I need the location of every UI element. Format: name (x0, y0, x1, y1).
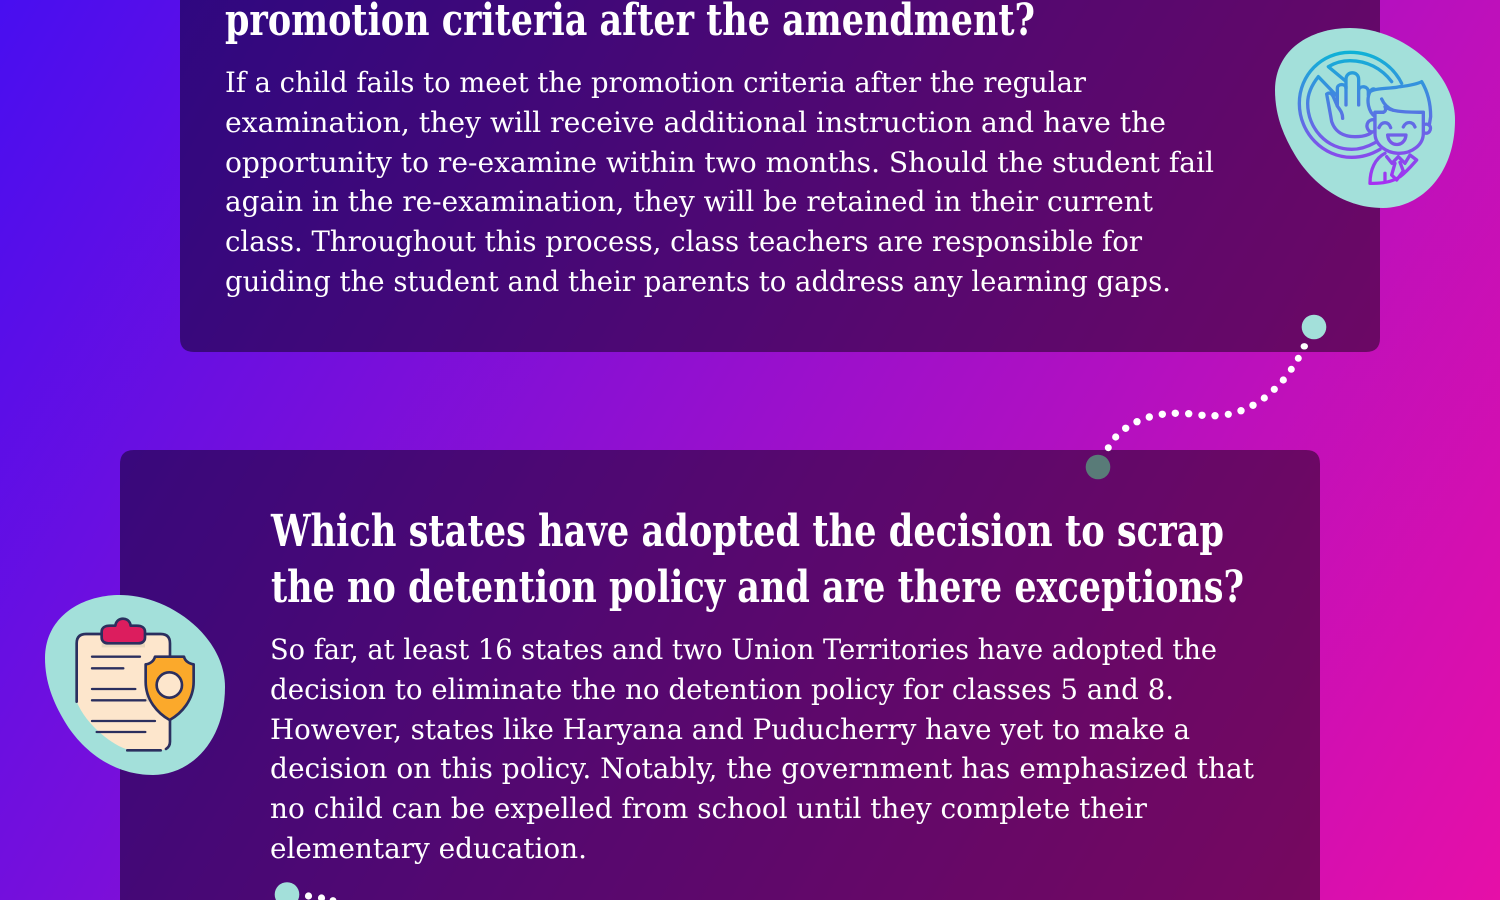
text block: states answer: decision to eliminate the no detention policy for classes 5 and 8. (270, 673, 1174, 706)
text block: promotion answer: again in the re-examination, they will be retained in their current (225, 185, 1154, 218)
panel: states adoption (120, 450, 1320, 900)
icon: no-entry hand and smiling boy (1275, 28, 1455, 208)
heading: states adoption: the no detention policy and are there exceptions? (271, 562, 1244, 613)
connector start dot under lower panel (1086, 455, 1110, 479)
heading: states adoption: Which states have adopted the decision to scrap (270, 506, 1224, 557)
connector: dotted path between panels (1105, 315, 1326, 451)
text block: states answer: decision on this policy. Notably, the government has emphasized that (270, 752, 1255, 785)
sheet outline (77, 634, 170, 750)
connector: dotted path leaving lower panel (275, 882, 336, 900)
shadows (102, 643, 170, 702)
text block: promotion answer: opportunity to re-examine within two months. Should the student fail (225, 146, 1214, 179)
shield (146, 657, 194, 720)
icon: clipboard with shield (45, 595, 225, 775)
text block: promotion answer: guiding the student and their parents to address any learning gaps. (225, 265, 1171, 298)
shield emblem (157, 672, 182, 698)
clipboard lines (92, 657, 155, 732)
text block: promotion answer: If a child fails to meet the promotion criteria after the regular (225, 66, 1087, 99)
text block: promotion answer: examination, they will receive additional instruction and have the (225, 106, 1166, 139)
text block: states answer: However, states like Haryana and Puducherry have yet to make a (270, 713, 1190, 746)
panel: promotion criteria (180, 0, 1380, 352)
text block: promotion answer: class. Throughout this process, class teachers are responsible for (225, 225, 1143, 258)
text block: states answer (270, 633, 1255, 865)
text block: promotion answer (225, 66, 1214, 298)
heading: states adoption (270, 506, 1244, 613)
text block: states answer: elementary education. (270, 832, 587, 865)
text block: states answer: So far, at least 16 states and two Union Territories have adopted the (270, 633, 1217, 666)
clipboard clip (102, 619, 145, 643)
text block: states answer: no child can be expelled from school until they complete their (270, 792, 1148, 825)
clipboard sheet (77, 634, 170, 750)
